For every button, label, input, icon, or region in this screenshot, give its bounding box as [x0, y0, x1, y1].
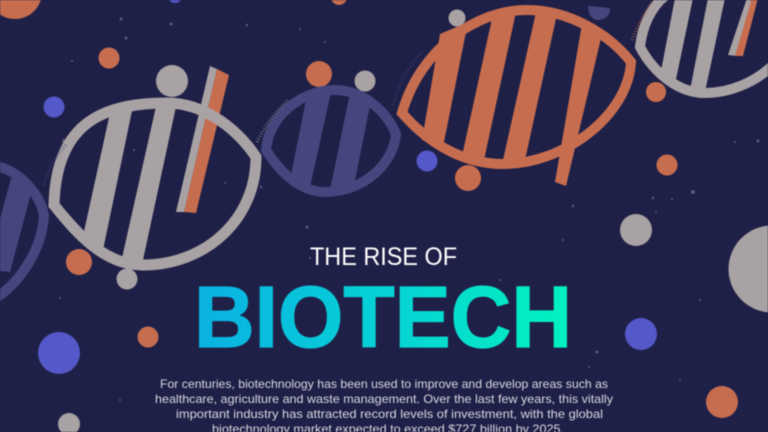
blue dot top	[168, 0, 182, 3]
orange dot	[656, 154, 678, 176]
speckled strand joins	[44, 2, 652, 185]
grey dot	[448, 10, 466, 26]
intro paragraph: healthcare, agriculture and waste management. Over the last few years, this vitally	[155, 392, 613, 406]
blue dot	[416, 150, 438, 172]
intro paragraph	[155, 377, 613, 432]
rungs	[83, 106, 133, 250]
orange dot top left	[0, 0, 42, 19]
orange dot	[455, 165, 481, 191]
grey dot large right	[728, 226, 768, 312]
orange dot bottom right	[706, 386, 738, 418]
title: biotech: BIOTECH	[194, 269, 572, 366]
DNA segment: grey right	[640, 0, 768, 93]
blue dot right	[625, 318, 657, 350]
rungs	[660, 0, 693, 84]
slate half dot	[588, 6, 610, 20]
orange dot	[646, 82, 666, 102]
orange dot	[306, 61, 332, 87]
blue dot	[44, 96, 64, 118]
grey dot	[116, 268, 138, 290]
rungs	[422, 22, 468, 147]
rung: grey and orange	[728, 0, 752, 56]
DNA segment: grey left	[54, 66, 256, 265]
rung: grey and orange	[176, 66, 217, 212]
DNA segment: orange	[402, 10, 631, 186]
DNA segment: slate centre	[266, 90, 396, 192]
orange dot	[66, 249, 92, 275]
orange dot top	[331, 0, 347, 5]
grey dot bottom	[58, 413, 80, 432]
intro paragraph: important industry has attracted record levels of investment, with the global	[176, 407, 603, 421]
orange dot	[98, 48, 120, 68]
grey dot right	[620, 214, 652, 246]
DNA segment: slate far left	[0, 166, 44, 298]
title: the rise of: THE RISE OF	[310, 243, 457, 271]
blue dot large	[38, 332, 80, 374]
intro paragraph: For centuries, biotechnology has been used to improve and develop areas such as	[160, 377, 608, 391]
grey dot	[156, 65, 188, 97]
grey dot	[354, 70, 376, 92]
orange dot	[138, 326, 158, 348]
